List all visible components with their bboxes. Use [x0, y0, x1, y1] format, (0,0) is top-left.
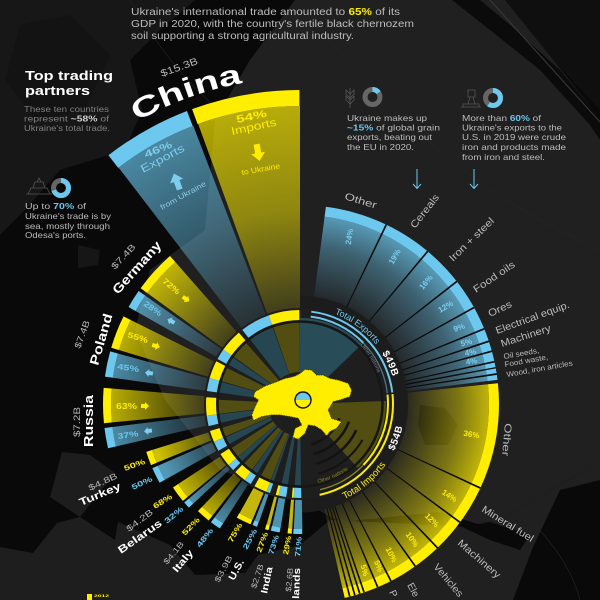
text: grain exports: the EU in 2020.	[347, 142, 414, 152]
donut: 15 percent	[365, 90, 380, 104]
export percentages: 4%	[465, 356, 478, 367]
Netherlands labels: lands	[291, 568, 303, 599]
Germany labels	[109, 237, 192, 326]
China labels: Imports	[230, 117, 278, 138]
text: grain exports: Ukraine makes up	[347, 113, 427, 123]
Poland labels: 55%	[126, 330, 149, 345]
Turkey labels	[77, 457, 154, 509]
import category labels: Ele	[404, 581, 421, 600]
text: grain exports: exports, beating out	[347, 132, 433, 142]
partner wedges	[107, 211, 493, 597]
import category labels: Other	[499, 423, 513, 457]
Netherlands labels	[281, 535, 304, 599]
Belarus labels: Belarus	[116, 517, 165, 556]
Belarus labels: $4.2B	[124, 507, 155, 534]
text: ten countries share: These ten countries	[24, 105, 109, 114]
Turkey labels: 50%	[123, 457, 147, 473]
Russia labels	[72, 394, 153, 447]
export percentages: 24%	[344, 228, 355, 245]
text: iron exports: iron and products made	[462, 142, 566, 152]
Russia labels: 37%	[117, 429, 139, 441]
export category labels: Food oils	[472, 260, 517, 295]
total exports value: $49B	[382, 350, 398, 376]
India labels: India	[259, 565, 276, 595]
Italy labels: 52%	[180, 515, 202, 537]
import percentages: 10%	[384, 546, 399, 564]
import percentages	[359, 429, 480, 577]
intro text	[131, 7, 414, 42]
arrow: to iron and steel	[470, 169, 478, 188]
legend	[87, 593, 110, 600]
export category labels: Iron + steel	[447, 216, 497, 264]
Netherlands labels: $2.6B	[284, 567, 295, 592]
other nations exports label: Other nations	[360, 344, 380, 372]
import category labels: Vehicles	[431, 562, 465, 600]
export percentages: 5%	[460, 337, 473, 348]
import percentages: 5%	[372, 559, 385, 573]
India labels: $2.7B	[249, 563, 266, 590]
text: iron exports: from iron and steel.	[462, 152, 545, 162]
Poland labels: $7.4B	[72, 319, 92, 350]
heading: top trading partners: partners	[25, 83, 90, 98]
Poland labels	[72, 312, 161, 378]
text: sea trade: Ukraine's trade is by	[25, 211, 112, 221]
export percentages	[344, 228, 478, 367]
text: sea trade: Odesa's ports.	[25, 230, 86, 240]
import category labels: Mineral fuel	[479, 504, 535, 545]
export percentages: 9%	[452, 321, 466, 334]
Germany labels: $7.4B	[109, 242, 138, 271]
Italy labels: $4.1B	[162, 540, 186, 566]
Turkey labels: $4.8B	[87, 470, 119, 493]
Russia labels: Russia	[81, 394, 96, 447]
export category labels: Cereals	[409, 193, 442, 231]
Italy labels	[162, 515, 215, 575]
Italy labels: Italy	[171, 548, 196, 575]
donut: 60 percent	[486, 90, 500, 106]
text: sea trade	[25, 201, 112, 240]
text: grain exports: ~15% of global grain	[347, 122, 440, 132]
Poland labels: 45%	[117, 362, 140, 374]
imports by product fan	[106, 210, 494, 598]
other nations imports label: Other nations	[318, 468, 348, 483]
China labels: to Ukraine	[241, 161, 281, 177]
export category labels: Oil seeds,	[503, 346, 540, 361]
import percentages: 5%	[359, 564, 370, 577]
exports by product fan	[106, 210, 494, 598]
import category labels	[386, 423, 535, 600]
export category labels: Food waste,	[504, 352, 549, 369]
Germany labels: Germany	[109, 237, 165, 297]
U.S. labels	[213, 521, 259, 584]
icon: wheat	[346, 88, 354, 108]
export percentages: 19%	[387, 248, 403, 266]
export category labels: Other	[343, 191, 379, 212]
Netherlands labels: 71%	[293, 536, 304, 557]
India labels	[249, 530, 281, 595]
text: iron exports	[462, 113, 566, 162]
legend: 2012	[94, 593, 110, 598]
text: sea trade: Up to 70% of	[25, 201, 87, 211]
China labels: from Ukraine	[159, 179, 208, 212]
Belarus labels: 32%	[163, 504, 186, 526]
Italy labels: 48%	[194, 526, 215, 549]
intro text: GDP in 2020, with the country's fertile black chernozem	[131, 19, 414, 30]
China labels: 46%	[143, 140, 174, 161]
export percentages: 16%	[417, 273, 435, 291]
central dark disc	[198, 302, 402, 506]
Russia labels: 63%	[116, 402, 137, 411]
text: grain exports	[347, 113, 440, 152]
text: iron exports: Ukraine's exports to the	[462, 122, 562, 132]
Russia labels: $7.2B	[72, 407, 82, 437]
import category labels: P	[386, 589, 399, 600]
icon: iron furnace	[461, 90, 481, 107]
Belarus labels: 68%	[151, 492, 174, 511]
Poland labels: Poland	[86, 312, 116, 367]
intro text: soil supporting a strong agricultural industry.	[131, 31, 354, 42]
export percentages: 4%	[464, 347, 477, 358]
export percentages: 12%	[437, 299, 455, 315]
India labels: 27%	[254, 530, 270, 554]
text: iron exports: U.S. in 2019 were crude	[462, 132, 566, 142]
import percentages: 12%	[423, 511, 441, 529]
total exports label: Total Exports	[336, 308, 379, 344]
intro text: Ukraine's international trade amounted to 65% of its	[131, 7, 400, 18]
Germany labels: 72%	[161, 277, 182, 296]
export category labels	[343, 191, 574, 379]
text: iron exports: More than 60% of	[462, 113, 542, 123]
export category labels: Machinery	[500, 323, 552, 350]
Netherlands labels: 29%	[281, 535, 293, 555]
Ukraine map with flag	[252, 369, 352, 439]
import percentages: 14%	[440, 488, 459, 504]
Belarus labels	[116, 492, 186, 556]
import percentages: 36%	[463, 429, 480, 440]
China labels: Exports	[139, 142, 187, 176]
China labels: China	[132, 70, 243, 117]
inner strands to Ukraine	[228, 332, 372, 476]
U.S. labels: $3.9B	[213, 554, 234, 584]
China labels: $15.3B	[159, 56, 200, 80]
text: ten countries share: represent ~58% of	[24, 114, 110, 124]
flow ring	[211, 315, 389, 493]
Germany labels: 28%	[142, 299, 163, 318]
text: ten countries share: Ukraine's total trade.	[24, 124, 110, 133]
icon: ship	[26, 178, 52, 194]
heading: top trading partners: Top trading	[25, 68, 113, 83]
China labels: 54%	[235, 108, 269, 126]
total imports label: Total Imports	[342, 462, 385, 498]
Turkey labels: Turkey	[77, 480, 123, 509]
Turkey labels: 50%	[130, 474, 154, 492]
export category labels: Electrical equip.	[494, 300, 571, 337]
export category labels: Wood, iron articles	[506, 358, 574, 379]
export category labels: Ores	[487, 299, 514, 320]
U.S. labels: 25%	[241, 527, 259, 551]
India labels: 73%	[266, 533, 281, 556]
China labels	[132, 56, 281, 212]
donut: 70 percent	[54, 180, 68, 196]
U.S. labels: 75%	[226, 521, 244, 544]
total exports and imports arcs	[207, 311, 393, 497]
import percentages: 10%	[404, 530, 420, 549]
import category labels: Machinery	[455, 538, 502, 581]
heading: top trading partners	[25, 68, 113, 98]
total imports value: $54B	[388, 426, 402, 450]
text: ten countries share	[24, 105, 110, 133]
arrow: to cereals	[413, 169, 421, 188]
text: sea trade: sea, mostly through	[25, 221, 110, 231]
U.S. labels: U.S.	[227, 558, 247, 582]
